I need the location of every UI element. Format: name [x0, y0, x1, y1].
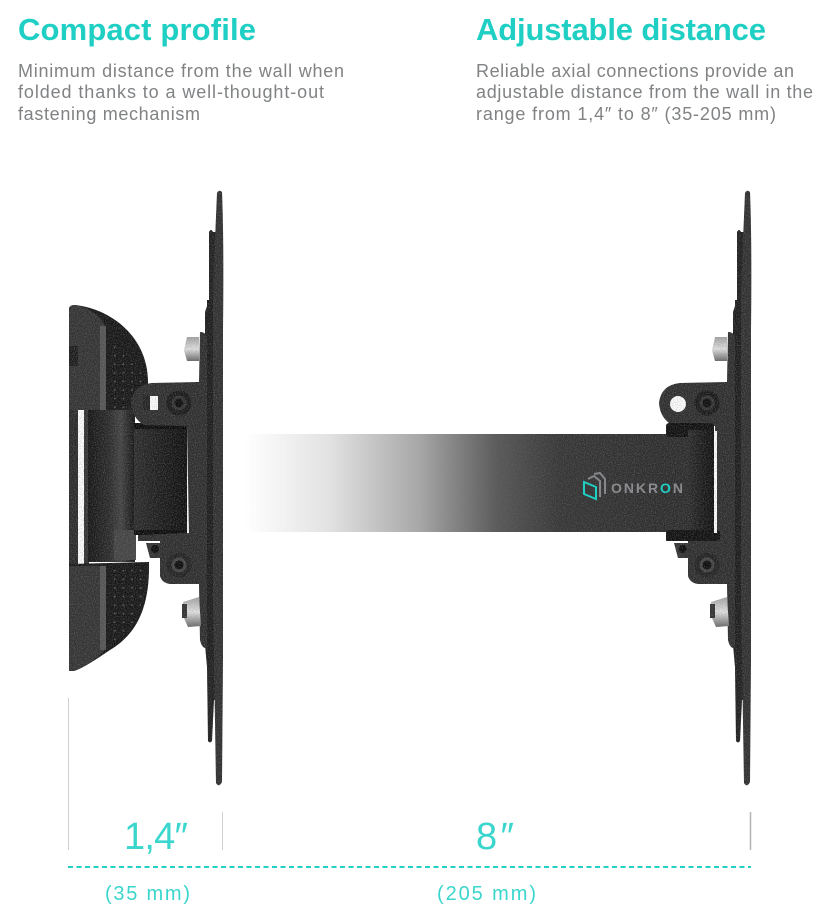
text block: adjustable distance description: Reliable axial connections provide an [476, 61, 794, 81]
arm grain texture [420, 434, 690, 532]
illustration: folded wall mount [69, 191, 223, 785]
mount hinge column [69, 408, 190, 566]
dashed measure line [68, 866, 751, 868]
text block: compact profile description: Minimum distance from the wall when [18, 61, 344, 81]
text block: compact profile description: fastening mechanism [18, 104, 200, 124]
heading: adjustable distance: Adjustable distance [476, 12, 766, 47]
panel: adjustable distance text [476, 12, 813, 124]
extended arm with fade [245, 434, 690, 532]
text block: adjustable distance description [476, 61, 813, 124]
text block: adjustable distance description: adjustable distance from the wall in the [476, 82, 813, 102]
mounting bracket, right [659, 191, 751, 785]
illustration: extended wall mount [245, 191, 751, 785]
measure: 205 mm: (205 mm) [437, 883, 536, 905]
heading: compact profile: Compact profile [18, 12, 256, 47]
panel: compact profile text [18, 12, 344, 124]
mounting bracket, left [131, 191, 223, 785]
measure: 1,4 inches: 1,4″ [124, 816, 188, 858]
measure: 35 mm: (35 mm) [105, 883, 190, 905]
text block: compact profile description: folded thanks to a well-thought-out [18, 82, 324, 102]
hinge cylinder [666, 423, 720, 541]
icon: logo cube [584, 473, 605, 499]
text block: compact profile description [18, 61, 344, 124]
logo wordmark: ONKRON [611, 480, 683, 496]
text block: adjustable distance description: range from 1,4″ to 8″ (35-205 mm) [476, 104, 776, 124]
extension lines [68, 698, 750, 850]
brand logo: ONKRON [584, 473, 683, 499]
measure: 8 inches: 8″ [476, 816, 514, 858]
dimension scale [68, 698, 751, 905]
wall plate lower housing [69, 562, 149, 671]
wall plate upper housing [69, 305, 148, 410]
